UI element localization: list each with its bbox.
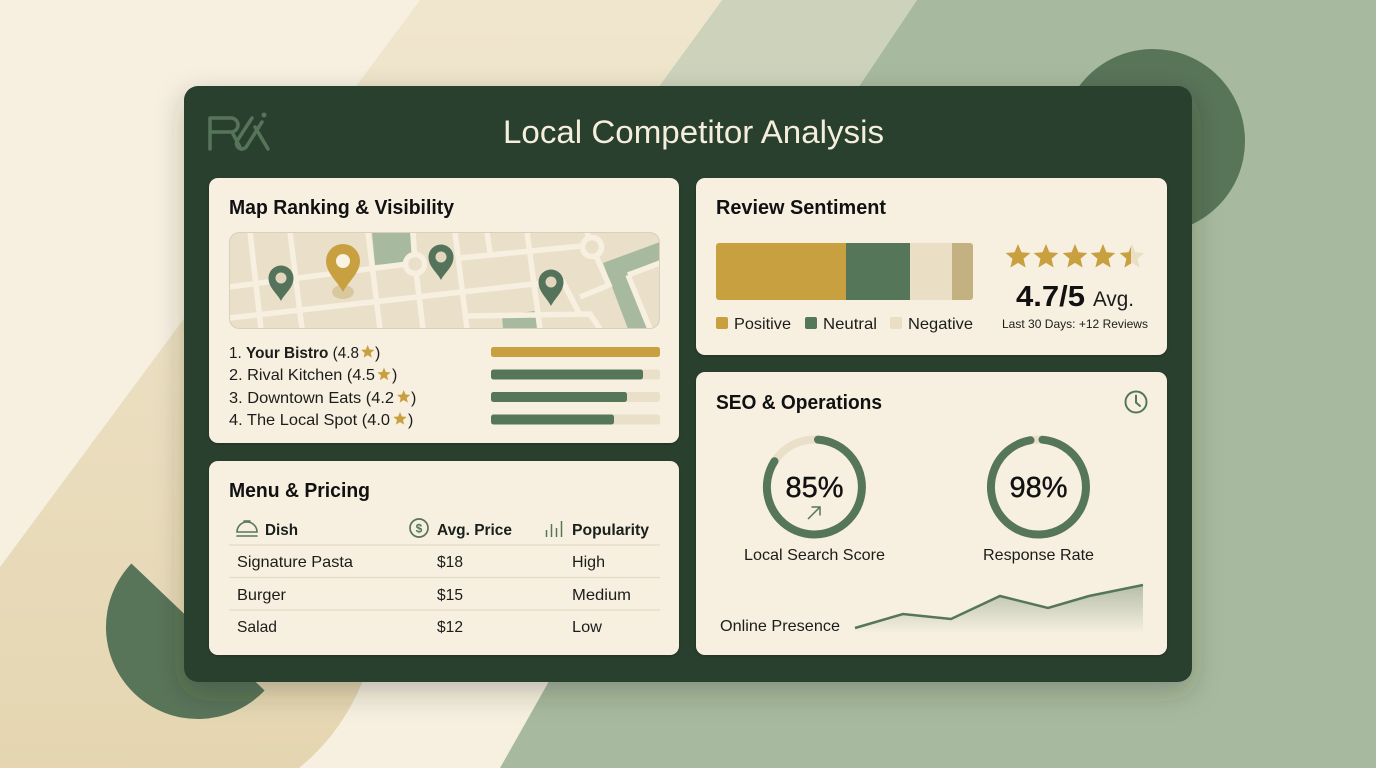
- ranking list: ): [375, 345, 380, 362]
- ranking list: [229, 345, 416, 429]
- review count note: Last 30 Days: +12 Reviews: [1002, 317, 1148, 331]
- table header: dish: Dish: [265, 522, 298, 539]
- label: local search score: Local Search Score: [744, 547, 885, 564]
- ranking list: ): [408, 412, 413, 429]
- table rows: Low: [572, 619, 602, 636]
- icon: dollar coin: $: [416, 522, 423, 536]
- stacked sentiment bar: [716, 243, 973, 300]
- table rows: [229, 545, 660, 636]
- sparkline: online presence: [855, 585, 1143, 634]
- decorative pie: bottom left: [106, 564, 265, 719]
- logo: [210, 112, 268, 149]
- gauge: response rate: [991, 440, 1086, 535]
- panel: review sentiment: [696, 178, 1167, 355]
- average score: [1016, 281, 1134, 313]
- gauge: response rate: 98%: [1009, 472, 1068, 504]
- sentiment legend: Negative: [908, 316, 973, 333]
- table header: average price: Avg. Price: [437, 522, 512, 539]
- table rows: High: [572, 554, 605, 571]
- panel: seo and operations: [696, 372, 1167, 655]
- ranking list: 4. The Local Spot (4.0: [229, 412, 390, 429]
- map: [229, 232, 660, 329]
- table rows: Signature Pasta: [237, 554, 353, 571]
- gauge: local search score: 85%: [785, 472, 844, 504]
- panel: map ranking and visibility: [209, 178, 679, 443]
- ranking list: 1. Your Bistro (4.8: [229, 345, 359, 362]
- ranking bars: [491, 347, 660, 424]
- ranking list: ): [392, 367, 397, 384]
- sentiment legend: [716, 316, 973, 333]
- table rows: Medium: [572, 587, 631, 604]
- ranking list: 2. Rival Kitchen (4.5: [229, 367, 375, 384]
- icon: popularity bars: [546, 521, 562, 537]
- table rows: Burger: [237, 587, 287, 604]
- star rating: [1006, 244, 1144, 268]
- icon: clock: [1126, 392, 1146, 412]
- gauge: local search score: [767, 440, 862, 534]
- heading: menu and pricing: Menu & Pricing: [229, 480, 370, 502]
- table header: popularity: Popularity: [572, 522, 649, 539]
- icon: service bell: [237, 521, 257, 536]
- table rows: $15: [437, 587, 463, 604]
- table rows: Salad: [237, 619, 277, 636]
- icon: dollar coin: [410, 519, 428, 537]
- average score: 4.7/5: [1016, 281, 1085, 313]
- heading: seo and operations: SEO & Operations: [716, 392, 882, 414]
- heading: map ranking: Map Ranking & Visibility: [229, 197, 455, 219]
- panel: menu and pricing: [209, 461, 679, 655]
- ranking list: 3. Downtown Eats (4.2: [229, 390, 394, 407]
- heading: review sentiment: Review Sentiment: [716, 197, 886, 219]
- average score: Avg.: [1093, 288, 1134, 311]
- decorative circle: top right: [1061, 49, 1245, 233]
- sentiment legend: Neutral: [823, 316, 877, 333]
- table rows: $12: [437, 619, 463, 636]
- sentiment legend: Positive: [734, 316, 791, 333]
- ranking list: ): [411, 390, 416, 407]
- dashboard panel: [184, 86, 1192, 682]
- title: Local Competitor Analysis: [503, 114, 884, 150]
- label: response rate: Response Rate: [983, 547, 1094, 564]
- table rows: $18: [437, 554, 463, 571]
- label: online presence: Online Presence: [720, 618, 840, 635]
